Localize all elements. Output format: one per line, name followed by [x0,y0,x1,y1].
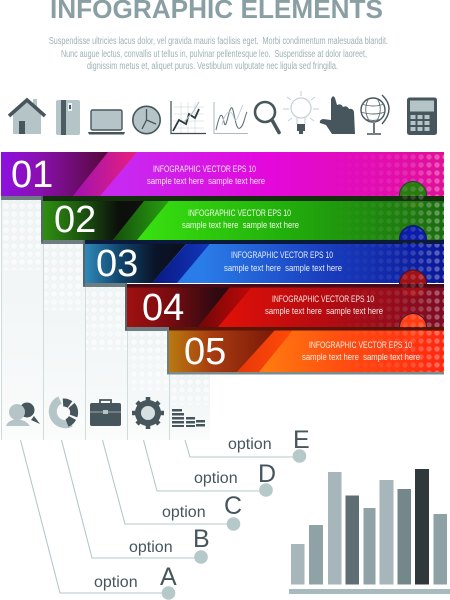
lower icon: people [6,402,40,426]
band 04 [125,270,444,331]
option D connector: option [194,470,238,487]
option C connector: option [162,504,206,521]
intro paragraph: dignissim metus et, aliquet purus. Vestibulum vulputate nec ligula sed fringilla. [87,61,338,72]
option A connector: option [94,574,138,591]
band 04 text [265,294,383,317]
lower icon: stacked bars [172,409,205,427]
lower icon: donut chart [53,400,74,424]
lower icon: briefcase [90,400,121,426]
number 03: 03 [96,243,138,285]
icon: globe [361,95,389,134]
icon: house [9,99,45,134]
background columns [2,198,210,440]
icon row [9,91,437,135]
number 01: 01 [11,154,53,196]
band 05 text [302,340,420,363]
band 01 [1,152,444,200]
option E connector [185,426,310,463]
number 04: 04 [142,287,184,329]
lower icon: gear [132,397,164,429]
band 02 text [182,208,299,231]
number 02: 02 [54,199,96,241]
icon: line chart [171,101,206,134]
band 04 text: sample text here sample text here [265,306,383,317]
band 02 [41,181,444,244]
band 03 text [224,250,342,274]
option A connector [20,440,177,600]
option D connector: D [258,460,276,488]
band 05 [167,313,444,374]
option B connector [62,440,210,564]
band 05 text: sample text here sample text here [302,352,420,363]
icon: laptop [88,110,125,134]
icon: wave chart [214,102,248,134]
icon: calculator [407,98,437,135]
icon: notebook [56,100,80,135]
intro paragraph [49,36,388,72]
icon: pointing hand [320,96,355,134]
option B connector: B [193,525,210,553]
band 01 text [147,164,265,187]
option D connector [144,440,276,497]
icon: light bulb [283,91,319,134]
option B connector: option [129,539,173,556]
band 03 text: INFOGRAPHIC VECTOR EPS 10 [231,250,333,261]
band 04 text: INFOGRAPHIC VECTOR EPS 10 [272,294,374,305]
icon: magnifier [255,102,279,132]
bar chart [289,469,450,594]
option E connector: E [293,426,310,454]
band 03 text: sample text here sample text here [224,263,342,274]
band 03 [83,225,444,287]
option C connector [102,440,242,531]
band 01 text: sample text here sample text here [147,176,265,187]
option E connector: option [228,436,272,453]
band 02 text: sample text here sample text here [182,220,299,231]
number 05: 05 [184,331,226,373]
band 01 text: INFOGRAPHIC VECTOR EPS 10 [153,164,256,175]
band 05 text: INFOGRAPHIC VECTOR EPS 10 [309,340,412,351]
band 02 text: INFOGRAPHIC VECTOR EPS 10 [188,208,291,219]
icon: clock [133,106,160,134]
option C connector: C [224,492,242,520]
option A connector: A [160,563,177,591]
